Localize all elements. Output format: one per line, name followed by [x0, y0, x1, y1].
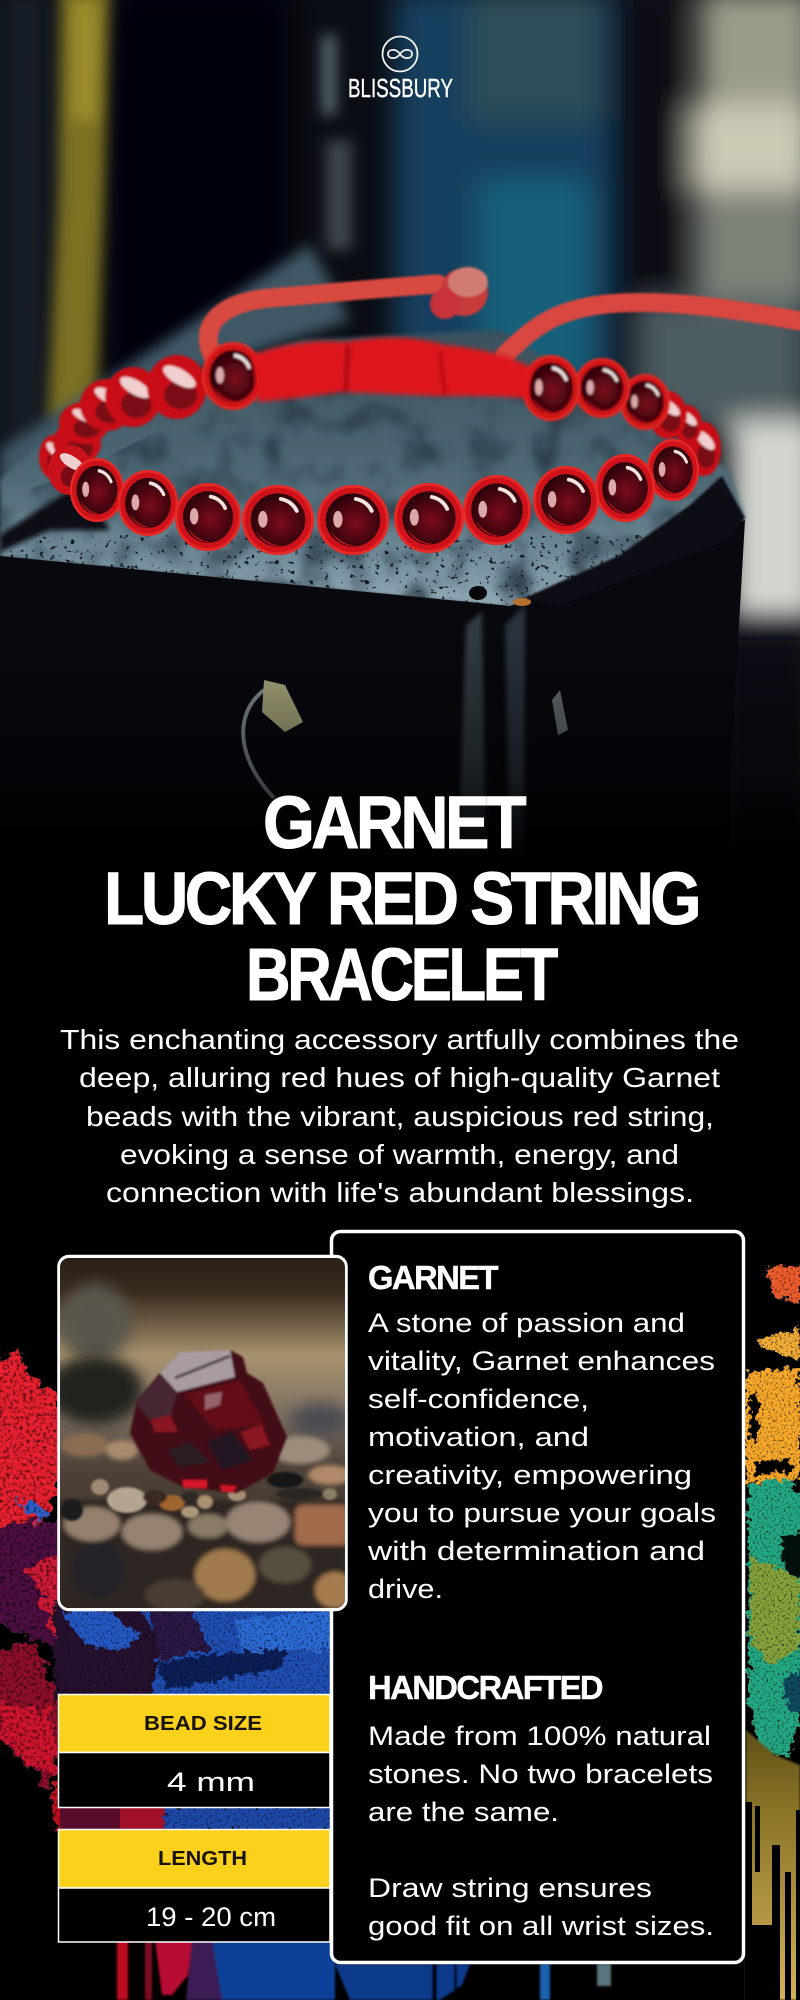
right drawstring: [505, 302, 800, 355]
text: handcrafted description: Made from 100% natural: [368, 1721, 711, 1751]
intro paragraph: This enchanting accessory artfully combines the: [60, 1024, 739, 1055]
spec: bead size: BEAD SIZE: [144, 1712, 262, 1735]
text: handcrafted description: stones. No two bracelets: [368, 1759, 713, 1789]
text: garnet description: motivation, and: [368, 1422, 589, 1452]
spec: length: [58, 1830, 330, 1942]
title: [104, 781, 698, 1016]
title: GARNET: [263, 781, 526, 864]
sliding knot: [252, 338, 532, 402]
platform: dark block with speckled top: [0, 240, 748, 832]
brand name: BLISSBURY: [348, 73, 453, 103]
paint splash: left: [0, 1352, 338, 1832]
text: handcrafted description: [368, 1721, 714, 1941]
text: garnet description: you to pursue your goals: [368, 1498, 716, 1528]
heading: handcrafted: HANDCRAFTED: [368, 1669, 603, 1706]
back row beads: [39, 342, 721, 479]
text: garnet description: self-confidence,: [368, 1384, 589, 1414]
text: handcrafted description: Draw string ensures: [368, 1873, 652, 1903]
photo: raw garnet on pebbles: [47, 1256, 355, 1611]
paint splash: right: [745, 1264, 800, 1758]
text: garnet description: vitality, Garnet enhances: [368, 1346, 715, 1376]
paint drips: bottom: [117, 1940, 611, 2000]
title: LUCKY RED STRING: [104, 857, 698, 940]
drawstring loop and knot: [208, 267, 488, 358]
fade to black under the photo: [0, 640, 800, 862]
intro paragraph: beads with the vibrant, auspicious red string,: [86, 1101, 714, 1132]
text: garnet description: creativity, empowering: [368, 1460, 692, 1490]
icon: infinity in circle: [382, 36, 418, 72]
spec: bead size: [58, 1694, 330, 1808]
intro paragraph: deep, alluring red hues of high-quality Garnet: [79, 1062, 720, 1093]
text: garnet description: with determination and: [367, 1536, 705, 1566]
spec: length: LENGTH: [158, 1847, 247, 1870]
text: garnet description: [367, 1308, 716, 1604]
text: handcrafted description: good fit on all wrist sizes.: [368, 1911, 714, 1941]
bracelet: [39, 267, 800, 555]
intro paragraph: evoking a sense of warmth, energy, and: [120, 1139, 679, 1170]
text: garnet description: A stone of passion and: [368, 1308, 685, 1338]
heading: garnet: GARNET: [368, 1259, 498, 1296]
intro paragraph: connection with life's abundant blessings.: [106, 1177, 694, 1208]
intro paragraph: [60, 1024, 739, 1208]
spec: length: 19 - 20 cm: [146, 1902, 276, 1932]
spec: bead size: 4 mm: [167, 1767, 255, 1797]
text: garnet description: drive.: [368, 1574, 443, 1604]
logo: Blissbury: [348, 36, 453, 103]
front row beads: [48, 439, 699, 555]
pebbles: [60, 1433, 355, 1611]
text: handcrafted description: are the same.: [368, 1797, 559, 1827]
paint drips: right: [745, 1730, 800, 2000]
background photo: blurred street scene: [0, 0, 800, 870]
title: BRACELET: [246, 933, 558, 1016]
garnet stone: [130, 1350, 287, 1493]
panel: description: [332, 1232, 744, 1962]
small sharp pebbles: [61, 1472, 337, 1521]
